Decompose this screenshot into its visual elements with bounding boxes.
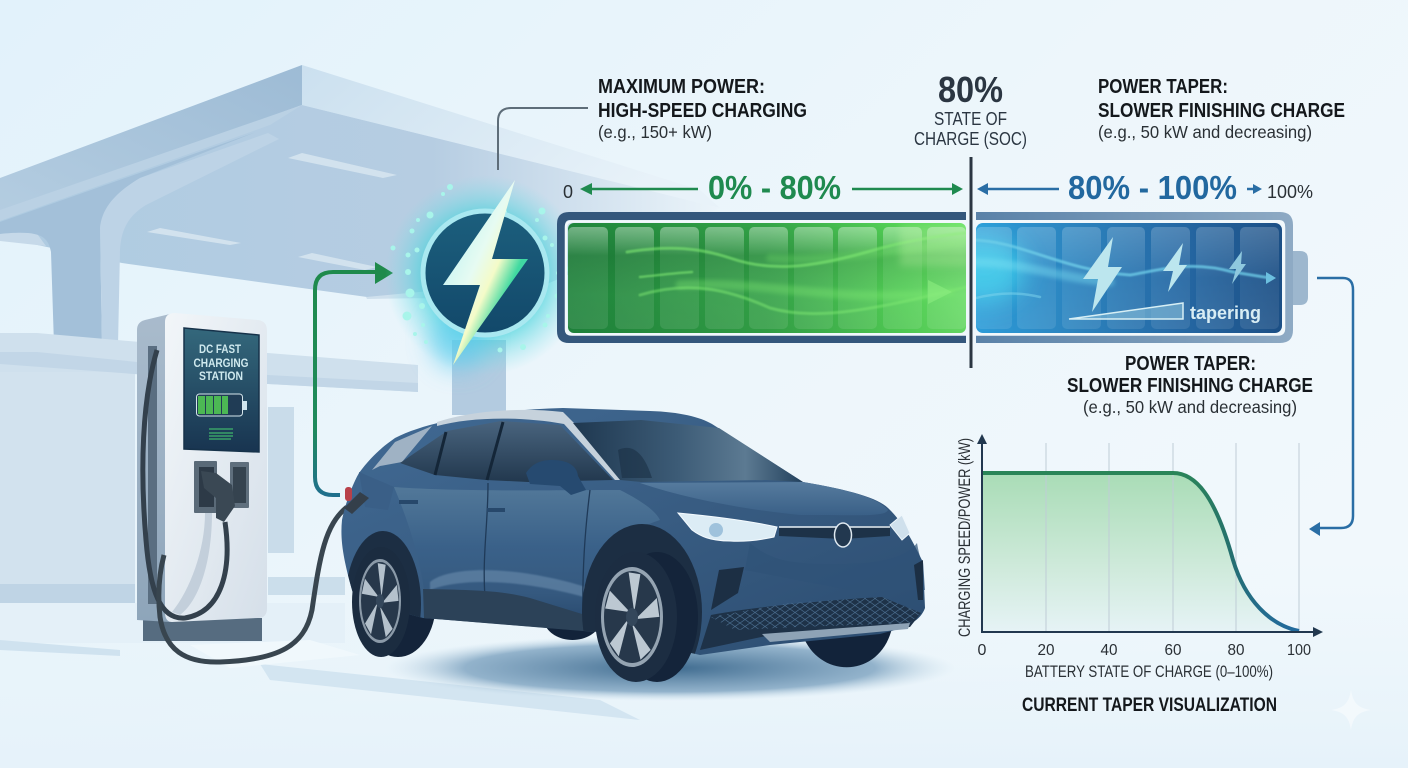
light bar	[779, 526, 890, 528]
seat silhouettes	[618, 448, 652, 478]
callout leader line	[498, 108, 588, 170]
battery	[557, 212, 1308, 343]
x tick labels: 80	[1228, 642, 1245, 659]
green cells	[568, 227, 966, 329]
left arrow	[590, 188, 698, 190]
range: 80 to 100 percent	[977, 169, 1313, 206]
badge	[834, 523, 852, 547]
wing mirror	[526, 460, 586, 495]
left arrowhead	[580, 183, 592, 195]
x tick labels: 0	[978, 642, 987, 659]
arrow: battery to taper chart	[1309, 278, 1353, 536]
plug handle	[201, 471, 235, 522]
terminal	[1290, 251, 1308, 305]
right arrow	[1247, 188, 1256, 190]
right arrowhead	[1253, 184, 1262, 194]
fill under curve	[982, 473, 1299, 632]
electric car	[341, 408, 925, 700]
charge flap	[359, 472, 394, 510]
front grille band	[779, 526, 890, 539]
text: power taper lower: SLOWER FINISHING CHARGE	[1067, 374, 1313, 397]
station name: STATION	[199, 369, 243, 383]
station base	[143, 618, 262, 641]
medium taper bolt	[1163, 243, 1187, 292]
side panel shading	[394, 487, 660, 620]
door lines and handles	[399, 483, 590, 622]
right arrowhead	[952, 183, 963, 195]
taper curve	[1173, 473, 1299, 631]
car shadow	[385, 635, 955, 701]
blue cells	[976, 227, 1279, 329]
text: 80 percent state of charge: STATE OF	[934, 109, 1007, 129]
charge plug	[344, 492, 369, 514]
side air intake	[711, 567, 744, 610]
rear tyre depth	[360, 547, 436, 657]
x tick labels	[978, 642, 1311, 659]
text: maximum power: HIGH-SPEED CHARGING	[598, 99, 807, 122]
left arrow	[985, 188, 1059, 190]
x tick labels: 60	[1164, 642, 1182, 659]
lower cladding	[423, 589, 595, 632]
front bumper lower	[700, 597, 921, 650]
canopy pillar light face	[100, 133, 279, 345]
blue range label: 80% - 100%	[1068, 169, 1237, 206]
front wheel	[595, 552, 698, 682]
far front tyre	[801, 628, 892, 667]
hundred label: 100%	[1267, 182, 1313, 202]
text: maximum power: (e.g., 150+ kW)	[598, 122, 712, 142]
text: 80 percent state of charge: CHARGE (SOC)	[914, 129, 1027, 149]
taper wedge	[1069, 303, 1183, 319]
mini battery	[196, 394, 247, 416]
charging cable to car	[159, 507, 347, 662]
text: 80 percent state of charge: 80%	[938, 69, 1003, 110]
left frame	[557, 212, 966, 343]
screen lines	[209, 429, 233, 439]
windshield	[573, 420, 803, 482]
blue energy waves	[970, 240, 1270, 298]
canopy support pillar	[0, 132, 256, 345]
flow arrow: station to bolt	[315, 262, 393, 495]
x tick labels: 40	[1100, 642, 1118, 659]
lightning bolt	[443, 180, 528, 365]
x axis title: BATTERY STATE OF CHARGE (0–100%)	[1025, 663, 1273, 681]
glow	[385, 175, 585, 375]
screen	[184, 328, 259, 452]
text: power taper top: (e.g., 50 kW and decreasing)	[1098, 122, 1312, 142]
text: power taper lower: POWER TAPER:	[1125, 352, 1256, 375]
text: power taper top: SLOWER FINISHING CHARGE	[1098, 99, 1345, 122]
sparks	[390, 184, 581, 352]
text: maximum power: MAXIMUM POWER:	[598, 75, 765, 98]
white inner line right	[976, 222, 1284, 334]
side windows	[400, 421, 613, 482]
x tick labels: 20	[1038, 642, 1055, 659]
green range label: 0% - 80%	[708, 169, 841, 206]
station name: CHARGING	[194, 356, 248, 370]
blue section	[945, 223, 1282, 333]
skid plate	[762, 623, 910, 642]
chart title: CURRENT TAPER VISUALIZATION	[1022, 694, 1277, 716]
window pillars	[435, 422, 503, 480]
side crease highlight	[430, 570, 595, 600]
y axis title: CHARGING SPEED/POWER (kW)	[956, 438, 974, 637]
small taper bolt	[1229, 251, 1246, 284]
building behind station	[0, 333, 418, 643]
second pillar behind bolt	[452, 340, 506, 415]
grille mesh	[711, 597, 921, 630]
station name: DC FAST	[199, 342, 242, 356]
watermark star	[1331, 690, 1371, 730]
y arrowhead	[977, 434, 987, 444]
large taper bolt	[1083, 237, 1122, 312]
axes	[982, 438, 1316, 632]
cyan transition glow	[976, 230, 1034, 310]
energy waves	[627, 232, 975, 314]
right frame	[976, 212, 1293, 343]
station front panel	[165, 313, 267, 622]
lower tip glow	[430, 310, 486, 370]
rear quarter silver	[372, 426, 432, 470]
flow arrowhead	[928, 280, 952, 304]
hood	[640, 482, 888, 515]
left arrowhead	[977, 183, 988, 195]
canopy roof	[0, 65, 720, 300]
zero label: 0	[563, 182, 573, 202]
text: power taper top: POWER TAPER:	[1098, 75, 1228, 98]
holster shadow	[172, 513, 212, 615]
connector holsters	[194, 461, 249, 513]
rear wheel	[352, 547, 410, 657]
flat power line	[982, 471, 1173, 475]
lightning orb icon	[385, 175, 585, 375]
tapering label: tapering	[1190, 303, 1261, 323]
text: power taper lower: (e.g., 50 kW and decreasing)	[1083, 397, 1297, 417]
headlight lens	[709, 523, 723, 537]
cable recess	[148, 346, 157, 604]
station side panel	[137, 314, 170, 622]
green section	[568, 223, 975, 333]
orb ring	[423, 211, 547, 335]
80 percent divider	[970, 157, 972, 368]
charging station	[137, 313, 267, 641]
roof rail silver	[437, 410, 622, 480]
blue flow arrowhead	[1266, 272, 1276, 284]
centre under body	[545, 625, 600, 640]
range: 0 to 80 percent	[563, 169, 963, 206]
car body	[341, 408, 925, 655]
taper chart	[956, 434, 1323, 716]
wheel arches	[348, 524, 702, 654]
tail light	[345, 487, 352, 501]
holster cable	[143, 350, 227, 618]
x arrowhead	[1313, 627, 1323, 637]
grid lines	[1046, 443, 1299, 632]
x tick labels: 100	[1287, 642, 1311, 659]
headlight	[678, 513, 777, 541]
white inner line	[566, 222, 966, 334]
front face panel	[745, 543, 925, 590]
right arrow	[852, 188, 955, 190]
right headlight	[890, 515, 910, 540]
right intake	[914, 560, 923, 600]
bright transition	[900, 226, 970, 266]
floor light stripes	[0, 640, 640, 720]
